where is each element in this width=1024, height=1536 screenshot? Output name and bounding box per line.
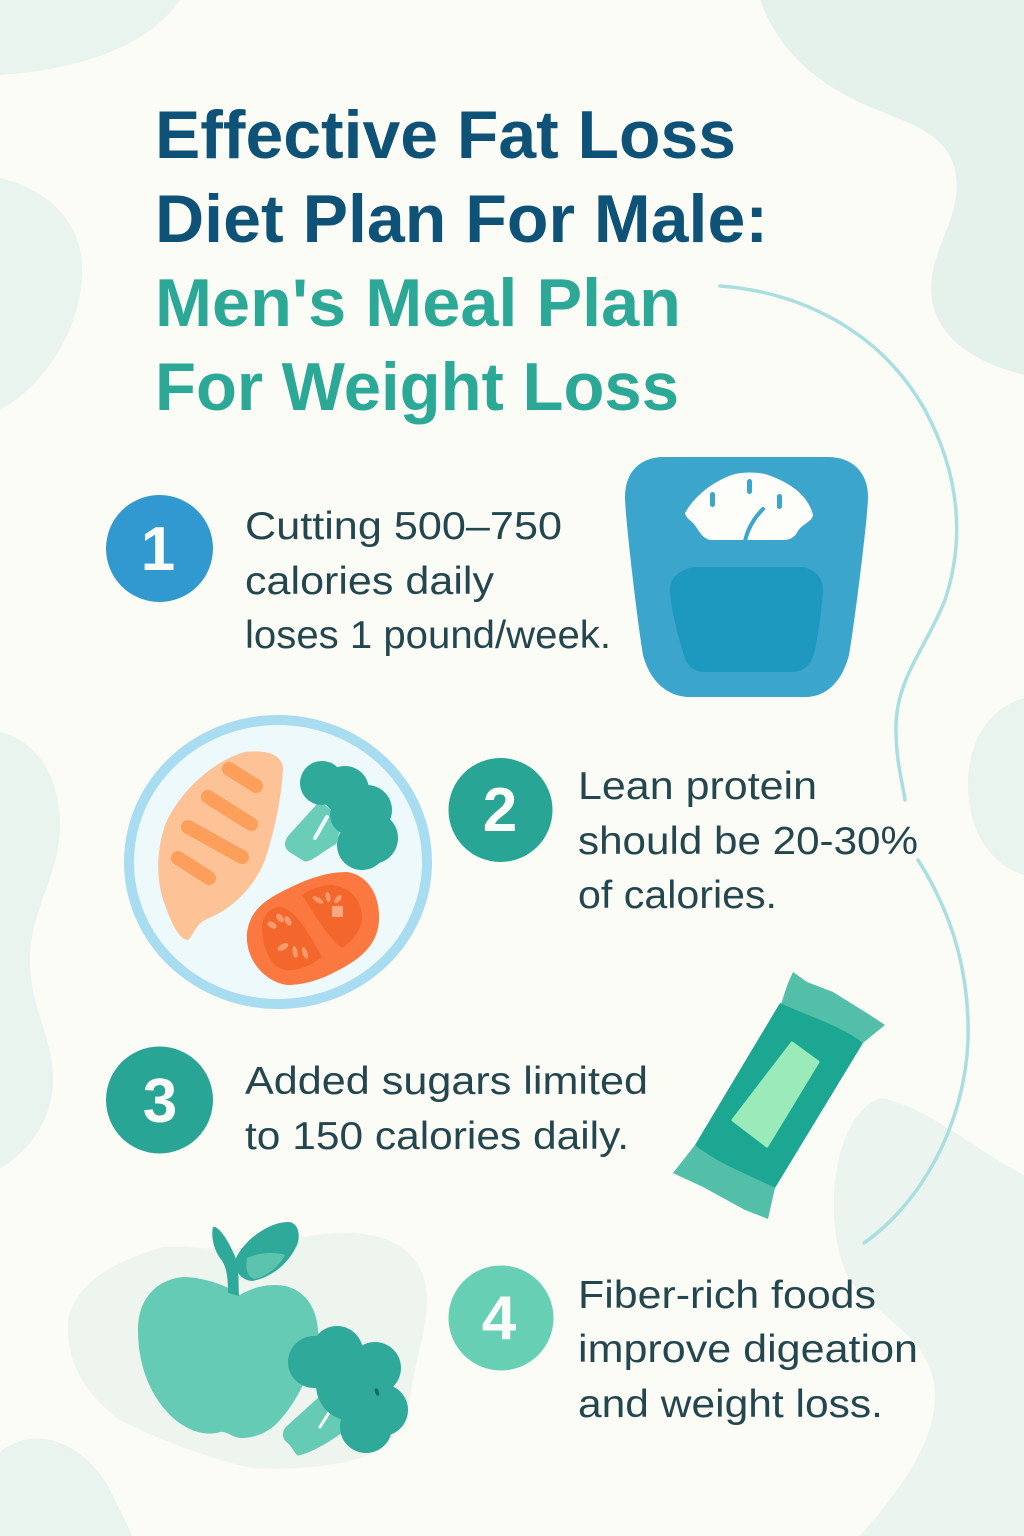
step 2 badge: 2	[483, 776, 517, 845]
step 1 text: Cutting 500–750	[245, 505, 562, 548]
step 3 badge: 3	[143, 1067, 177, 1136]
step 4 text: and weight loss.	[578, 1383, 883, 1426]
title: Effective Fat Loss	[155, 97, 736, 173]
step 3 text: Added sugars limited	[245, 1060, 648, 1103]
title: Men's Meal Plan	[155, 265, 681, 341]
icon: apple and broccoli	[138, 1222, 408, 1454]
step 2 text: of calories.	[578, 874, 777, 917]
title: For Weight Loss	[155, 349, 679, 425]
step 2 badge	[448, 758, 552, 862]
step 4 badge: 4	[482, 1284, 517, 1353]
step 1 text: loses 1 pound/week.	[245, 614, 611, 657]
step 3 text	[245, 1060, 648, 1158]
broccoli	[286, 761, 398, 870]
step 4 text: Fiber-rich foods	[578, 1274, 876, 1317]
decorative curved line	[720, 286, 968, 1243]
step 3 badge	[106, 1046, 213, 1154]
icon: bathroom scale	[625, 457, 868, 697]
step 2 text: should be 20-30%	[578, 820, 918, 863]
step 3 text: to 150 calories daily.	[245, 1115, 629, 1158]
step 1 text: calories daily	[245, 560, 495, 603]
chicken breast	[158, 751, 283, 940]
step 4 text: improve digeation	[578, 1328, 918, 1371]
step 4 badge	[448, 1266, 554, 1370]
icon: snack bar	[673, 972, 885, 1219]
icon: plate with chicken, broccoli and tomato	[129, 720, 427, 1004]
step 1 badge: 1	[141, 515, 175, 584]
title: Diet Plan For Male:	[155, 181, 768, 257]
tomato	[247, 872, 379, 985]
title	[155, 97, 768, 425]
step 4 text	[578, 1274, 918, 1426]
step 1 text	[245, 505, 611, 657]
step 2 text: Lean protein	[578, 765, 817, 808]
step 1 badge	[106, 495, 213, 602]
step 2 text	[578, 765, 918, 917]
